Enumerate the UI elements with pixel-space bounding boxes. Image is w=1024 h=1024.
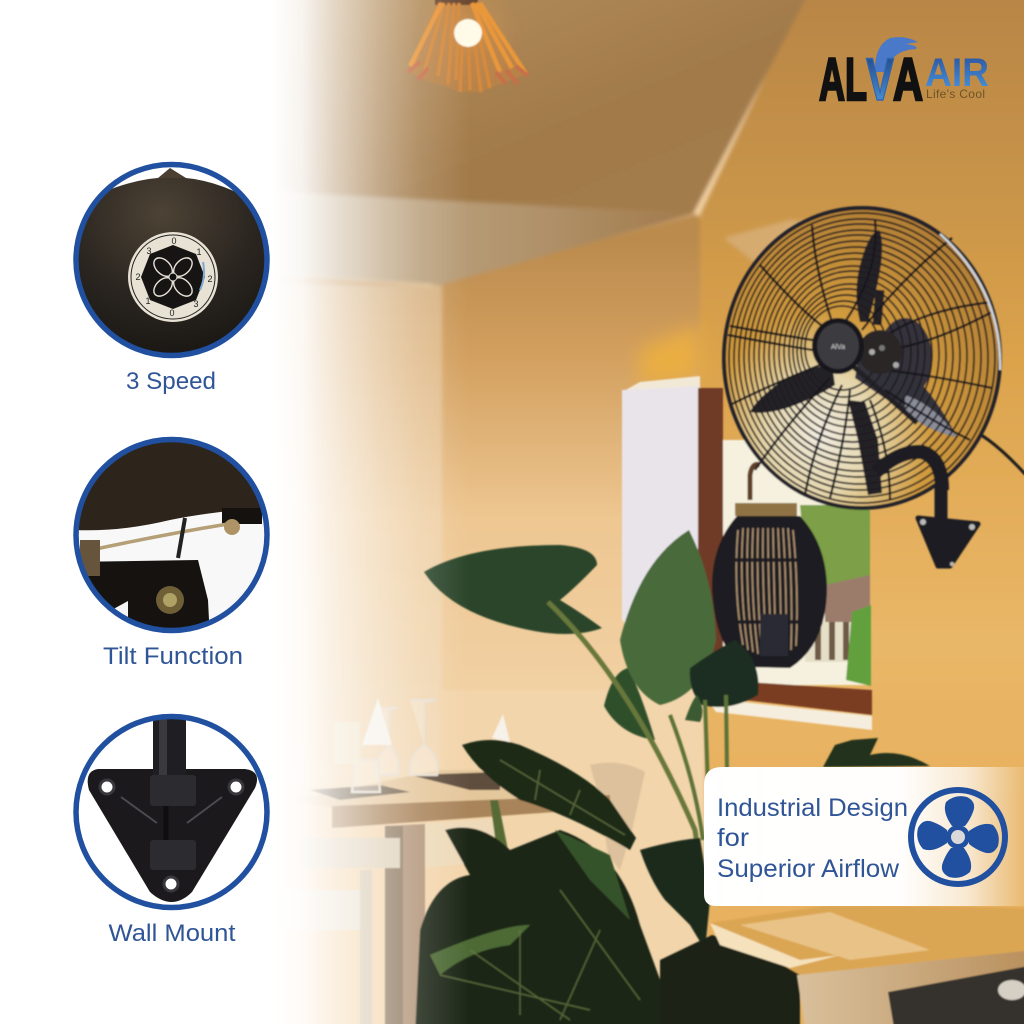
wall fan (724, 208, 1024, 566)
speed dial: 2 (135, 272, 141, 282)
wall corner left section (240, 285, 442, 785)
callout text: for (717, 824, 749, 852)
callout text (717, 794, 908, 883)
callout: industrial design (704, 767, 1024, 906)
callout text: Superior Airflow (717, 855, 900, 883)
speed dial: 3 (193, 299, 199, 309)
logo: Alva Air: V (866, 46, 894, 113)
motor shade through cage (878, 318, 932, 398)
icon: fan (911, 790, 1005, 884)
plant behind callout (823, 738, 930, 767)
cage rim (724, 208, 1000, 508)
speed dial: 3 (146, 246, 152, 256)
label: 3 Speed (126, 368, 216, 395)
pendant lamp (408, 0, 528, 92)
feature: 3 Speed (70, 160, 274, 395)
grill spokes (728, 220, 992, 500)
logo: Alva Air: AIR (925, 51, 989, 95)
logo swoosh (875, 37, 918, 72)
fan hub badge: AlVa (831, 344, 845, 351)
fan blades (750, 230, 957, 495)
speed dial: 0 (169, 308, 175, 318)
ceiling upper slope (240, 0, 821, 214)
feature: Tilt Function (70, 430, 274, 670)
label: Wall Mount (108, 920, 236, 947)
photo: speed dial (78, 168, 264, 353)
window recess (622, 376, 872, 730)
wall glow above window (640, 325, 700, 386)
speed dial: 0 (171, 236, 177, 246)
dark foliage below table (660, 935, 800, 1024)
candle and napkins (334, 722, 360, 764)
speed dial: 1 (196, 247, 202, 257)
feature: Wall Mount (70, 710, 274, 947)
fan hub badge (812, 318, 864, 374)
photo: tilt knob (78, 442, 262, 628)
motor hardware (858, 330, 902, 374)
grill rings (729, 213, 995, 503)
monstera by wall (640, 838, 710, 950)
right wall (700, 0, 1024, 1024)
bottom right tables (660, 905, 1024, 1024)
callout text: Industrial Design (717, 794, 908, 822)
chair (590, 763, 645, 870)
foreground tropical plant (415, 740, 680, 1024)
logo: Alva Air: AL (819, 46, 867, 113)
speed dial (128, 232, 218, 322)
logo: Alva Air: Life's Cool (926, 87, 985, 101)
dining table and glassware (280, 698, 610, 1024)
label: Tilt Function (103, 643, 243, 670)
photo: wall bracket (88, 719, 258, 902)
power cable (976, 432, 1024, 484)
first table top (710, 905, 1024, 975)
ceiling lower band (240, 190, 693, 285)
cage backdrop (724, 208, 1000, 508)
lantern (712, 464, 827, 668)
wall bracket (918, 475, 978, 566)
second table (797, 950, 1024, 1024)
left wall (240, 214, 730, 1024)
wine glasses (352, 700, 437, 792)
peach lower wall (440, 690, 705, 1024)
speed dial: 2 (207, 274, 213, 284)
support arm (876, 452, 942, 490)
wall sconce (724, 220, 818, 268)
logo: Alva Air: A (893, 46, 923, 113)
speed dial: 1 (145, 296, 151, 306)
logo: Alva Air (819, 37, 989, 113)
plant leaves near window (424, 530, 759, 900)
